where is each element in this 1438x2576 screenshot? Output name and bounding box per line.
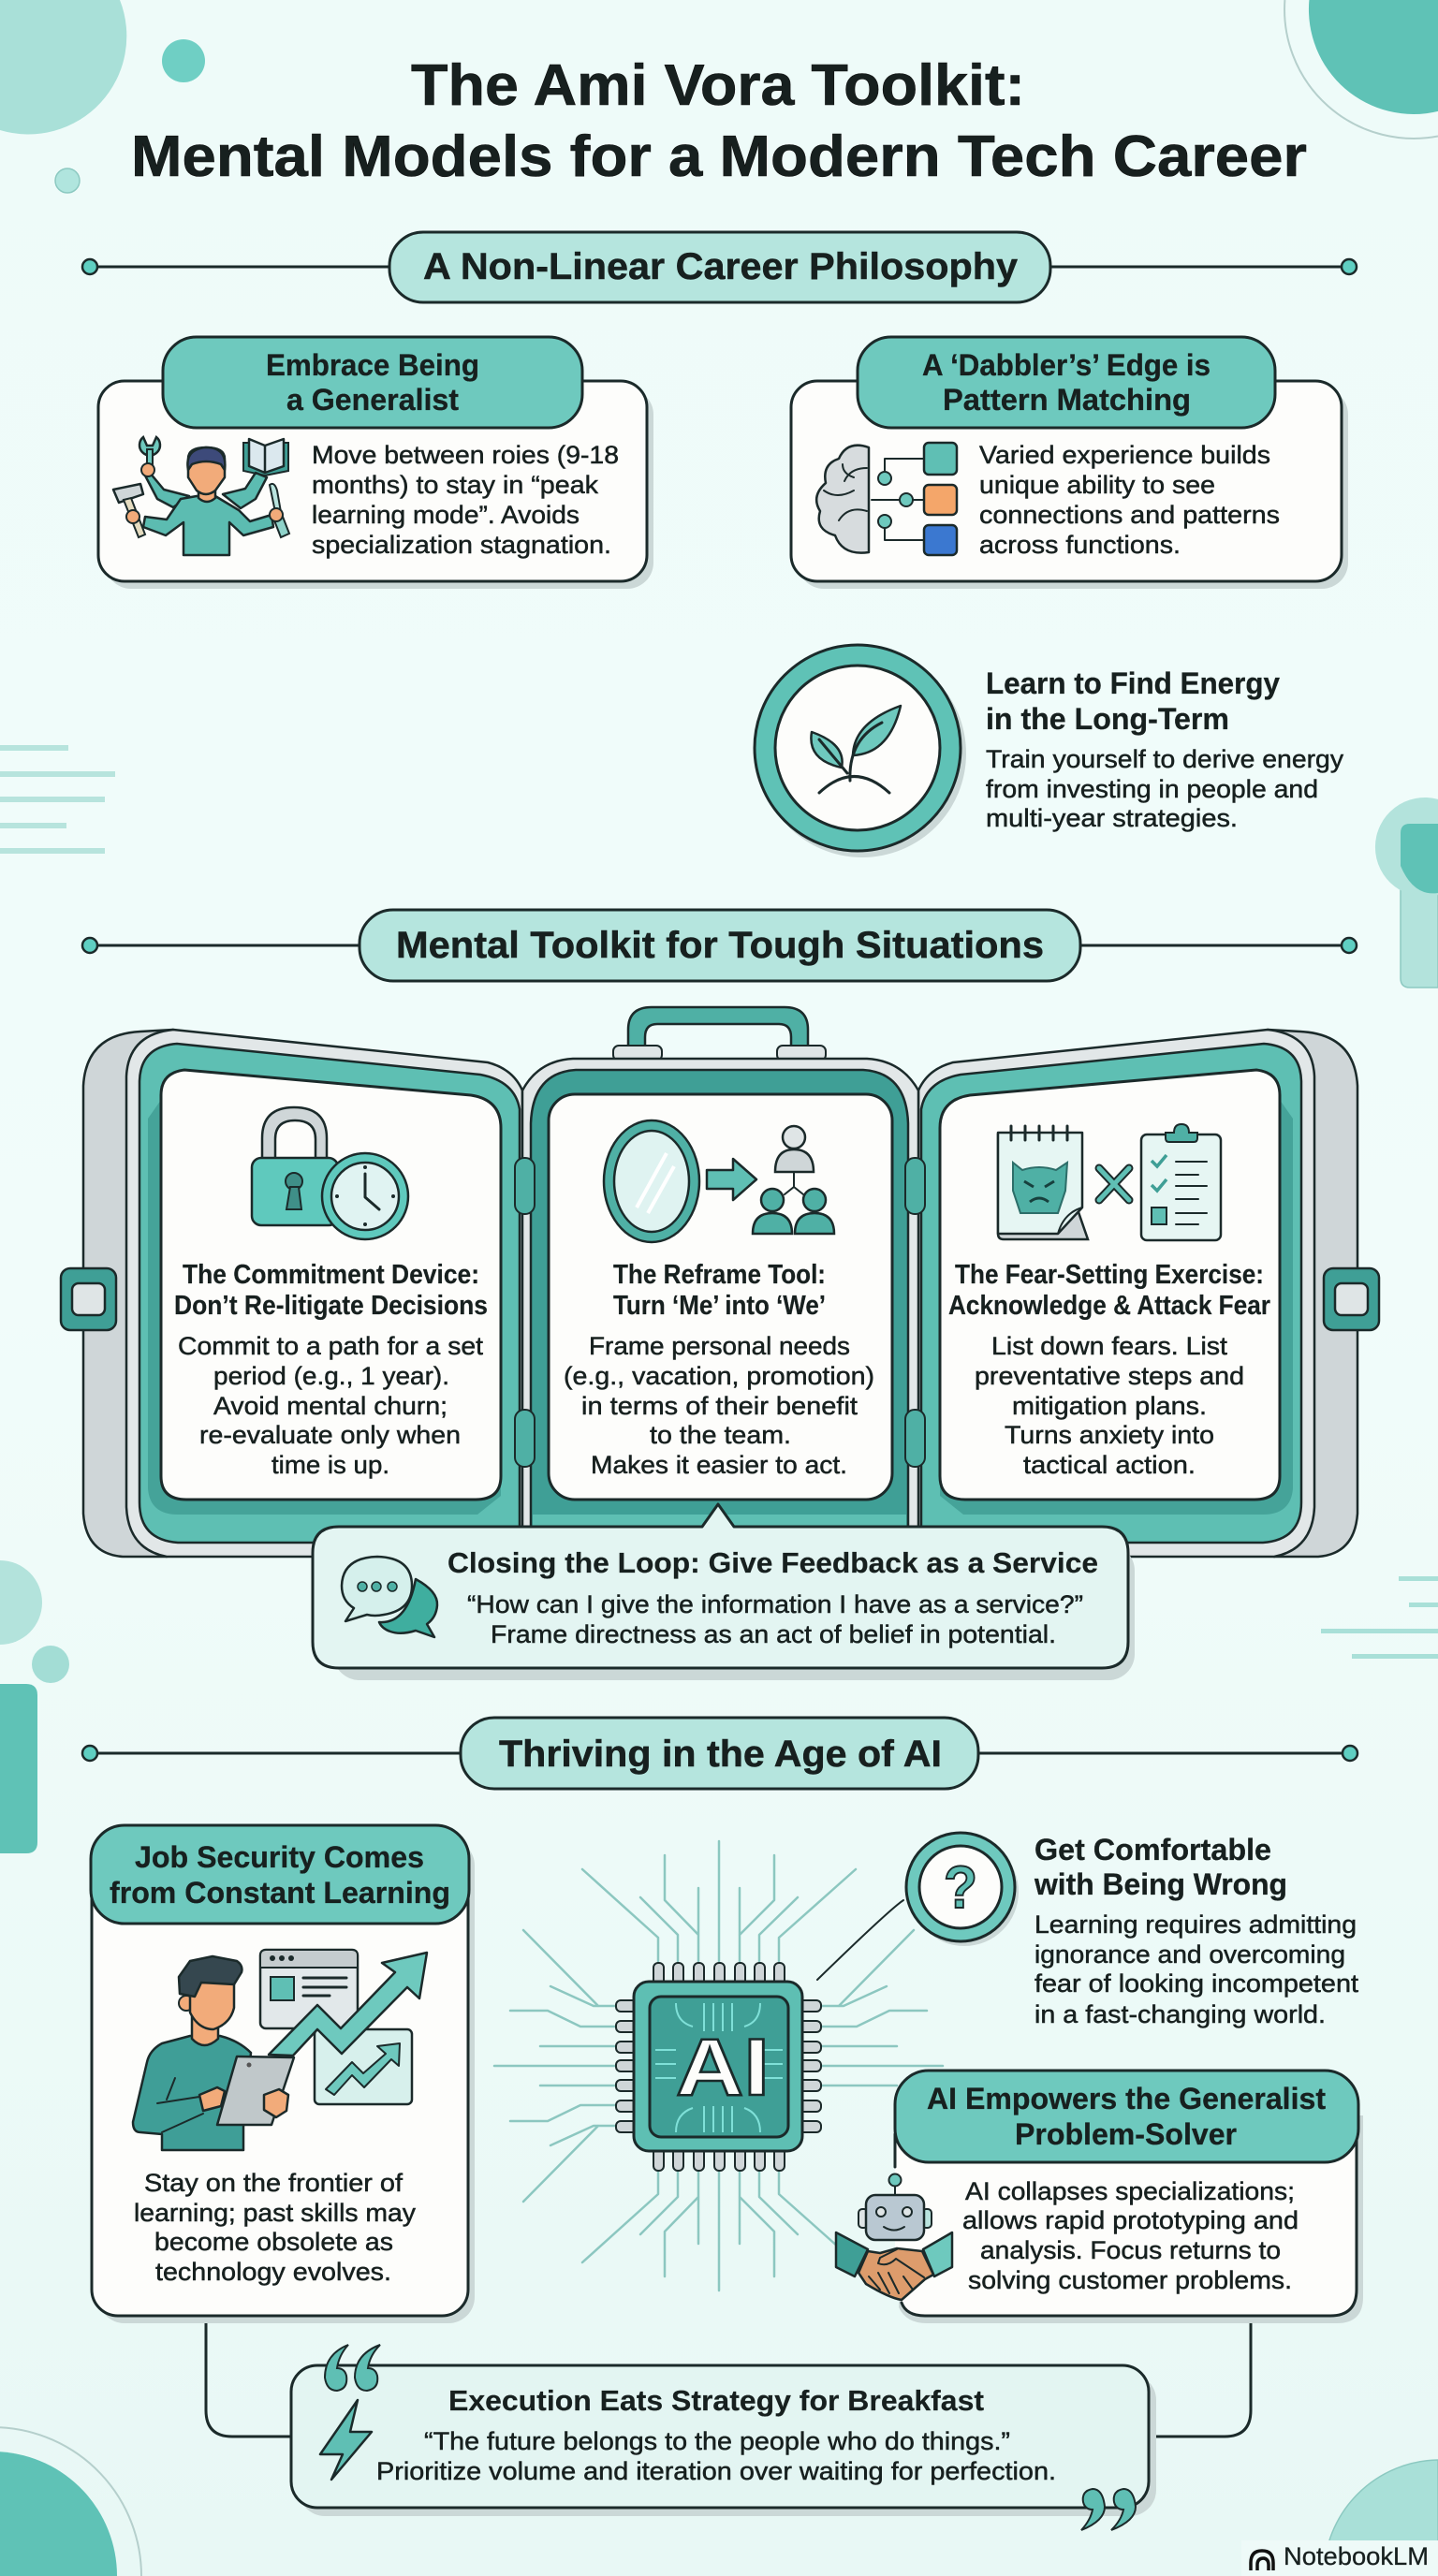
card header: AI Empowers the Generalist <box>927 2082 1326 2115</box>
NotebookLM logo: NotebookLM <box>1284 2542 1429 2570</box>
panel: commitment device <box>161 1070 501 1500</box>
body text: Train yourself to derive energy <box>986 745 1344 773</box>
card header <box>163 337 582 428</box>
panel: get comfortable with being wrong <box>817 1833 1359 2028</box>
body text <box>975 1332 1244 1479</box>
icon: closing quote mark <box>1081 2489 1136 2530</box>
body text: Varied experience builds <box>979 441 1270 469</box>
body text: Move between roies (9-18 <box>312 441 619 469</box>
body text: fear of looking incompetent <box>1034 1969 1359 1998</box>
body text: learning mode”. Avoids <box>312 501 580 529</box>
body text <box>134 2169 417 2286</box>
body text: analysis. Focus returns to <box>980 2236 1281 2264</box>
middle tray <box>522 1059 918 1557</box>
panel: execution eats strategy for breakfast <box>291 2345 1156 2530</box>
heading <box>948 1260 1270 1321</box>
section heading: Thriving in the Age of AI: Thriving in the Age of AI <box>499 1734 942 1775</box>
body text: Learning requires admitting <box>1034 1910 1357 1939</box>
icon: robot and handshake <box>836 2174 952 2300</box>
panel: reframe tool <box>549 1094 892 1500</box>
heading <box>1034 1833 1287 1901</box>
callout text: Closing the Loop: Give Feedback as a Service <box>448 1546 1098 1579</box>
body text: preventative steps and <box>975 1362 1244 1390</box>
title <box>131 53 1307 189</box>
suitcase handle <box>613 1007 826 1061</box>
connector lines to execution box <box>206 2316 1251 2437</box>
heading: Don’t Re-litigate Decisions <box>174 1291 488 1321</box>
heading: Learn to Find Energy <box>986 666 1280 700</box>
heading: The Commitment Device: <box>183 1260 479 1290</box>
quote text: “The future belongs to the people who do things.” <box>424 2427 1010 2455</box>
quote text: Prioritize volume and iteration over waiting for perfection. <box>376 2457 1056 2485</box>
heading: The Fear-Setting Exercise: <box>955 1260 1264 1290</box>
body text <box>962 2177 1299 2294</box>
section heading: Mental Toolkit for Tough Situations: Mental Toolkit for Tough Situations <box>396 925 1044 966</box>
icon: person with tablet and growth arrow <box>133 1950 427 2150</box>
left latch <box>61 1268 116 1330</box>
icon: speech bubbles <box>342 1557 437 1637</box>
body text: re-evaluate only when <box>199 1421 461 1449</box>
callout text: “How can I give the information I have as a service?” <box>467 1590 1083 1618</box>
panel: embrace being a generalist <box>98 337 653 589</box>
chip label: AI <box>676 2023 770 2113</box>
card header: from Constant Learning <box>110 1876 450 1910</box>
body text: across functions. <box>979 531 1181 559</box>
heading: Acknowledge & Attack Fear <box>948 1291 1270 1321</box>
body text: months) to stay in “peak <box>312 471 599 499</box>
icon: fear monster note and checklist <box>998 1124 1221 1240</box>
card header: Embrace Being <box>266 348 479 382</box>
body text: unique ability to see <box>979 471 1215 499</box>
body text: mitigation plans. <box>1012 1392 1207 1420</box>
body text <box>1034 1910 1359 2028</box>
body text: in a fast-changing world. <box>1034 2000 1326 2028</box>
body text: ignorance and overcoming <box>1034 1940 1345 1969</box>
panel: AI empowers the generalist <box>836 2071 1363 2323</box>
NotebookLM logo <box>1241 2540 1438 2576</box>
panel: dabbler's edge is pattern matching <box>791 337 1348 589</box>
body text: technology evolves. <box>155 2258 391 2286</box>
heading: Turn ‘Me’ into ‘We’ <box>613 1291 826 1321</box>
body text: (e.g., vacation, promotion) <box>564 1362 874 1390</box>
card header: Pattern Matching <box>943 383 1191 417</box>
body text: Avoid mental churn; <box>213 1392 448 1420</box>
body text: from investing in people and <box>986 775 1318 803</box>
card header: a Generalist <box>286 383 459 417</box>
body text: specialization stagnation. <box>312 531 611 559</box>
body text: in terms of their benefit <box>581 1392 858 1420</box>
AI chip with circuit lines <box>494 1841 943 2291</box>
icon: mirror, arrow and team <box>604 1120 834 1242</box>
body text <box>178 1332 484 1479</box>
body text <box>986 745 1344 832</box>
title: The Ami Vora Toolkit: <box>411 53 1025 118</box>
heading: The Reframe Tool: <box>613 1260 826 1290</box>
panel: learn to find energy in the long-term <box>755 645 1344 857</box>
heading <box>986 666 1280 736</box>
title: Mental Models for a Modern Tech Career <box>131 124 1307 189</box>
callout: closing the loop <box>313 1504 1135 1680</box>
body text: Turns anxiety into <box>1005 1421 1214 1449</box>
hinges <box>515 1158 925 1467</box>
section heading: A Non-Linear Career Philosophy: A Non-Linear Career Philosophy <box>423 246 1019 287</box>
icon: padlock and clock <box>252 1107 408 1239</box>
body text: Stay on the frontier of <box>144 2169 404 2197</box>
body text: period (e.g., 1 year). <box>213 1362 449 1390</box>
body text: become obsolete as <box>154 2228 393 2256</box>
callout text <box>448 1546 1098 1648</box>
chip pins <box>616 1963 821 2171</box>
body text: time is up. <box>271 1451 389 1479</box>
body text: connections and patterns <box>979 501 1280 529</box>
panel: job security <box>91 1825 475 2323</box>
body text: solving customer problems. <box>968 2266 1292 2294</box>
section heading: A Non-Linear Career Philosophy <box>82 232 1357 302</box>
body text <box>979 441 1280 559</box>
quote text <box>376 2384 1056 2485</box>
heading: with Being Wrong <box>1034 1867 1287 1901</box>
body text: AI collapses specializations; <box>965 2177 1295 2205</box>
card header <box>858 337 1275 428</box>
heading: Get Comfortable <box>1034 1833 1271 1866</box>
chip body <box>634 1982 802 2151</box>
icon: multi-armed person with tools <box>113 437 289 555</box>
icon: question mark ring: ? <box>944 1853 977 1921</box>
icon: question mark ring <box>906 1833 1019 1946</box>
circuit traces <box>494 1841 943 2291</box>
body text: Makes it easier to act. <box>591 1451 847 1479</box>
icon: opening quote mark <box>325 2345 380 2391</box>
body text: List down fears. List <box>991 1332 1228 1360</box>
connector line <box>817 1900 903 1980</box>
body text: tactical action. <box>1023 1451 1196 1479</box>
heading <box>613 1260 826 1321</box>
icon: brain connected to colored nodes <box>816 443 957 555</box>
section heading: Mental Toolkit for Tough Situations <box>82 910 1357 981</box>
heading: in the Long-Term <box>986 702 1229 736</box>
icon: sprout in ring <box>755 645 966 857</box>
section heading: Thriving in the Age of AI <box>82 1718 1357 1789</box>
body text: allows rapid prototyping and <box>962 2206 1299 2234</box>
right panel shell <box>918 1030 1357 1557</box>
body text: Frame personal needs <box>589 1332 850 1360</box>
card header: Problem-Solver <box>1015 2117 1237 2151</box>
card header: A ‘Dabbler’s’ Edge is <box>922 348 1211 382</box>
body text <box>312 441 619 559</box>
body text: Commit to a path for a set <box>178 1332 484 1360</box>
callout text: Frame directness as an act of belief in potential. <box>491 1620 1056 1648</box>
heading <box>174 1260 488 1321</box>
body text: to the team. <box>650 1421 791 1449</box>
icon: lightning bolt <box>320 2400 372 2480</box>
body text: learning; past skills may <box>134 2199 417 2227</box>
panel: fear-setting exercise <box>940 1070 1280 1500</box>
left panel shell <box>83 1030 522 1557</box>
card header: Job Security Comes <box>135 1840 424 1874</box>
quote text: Execution Eats Strategy for Breakfast <box>448 2384 984 2417</box>
toolkit suitcase <box>61 1007 1379 1557</box>
card header <box>91 1825 469 1924</box>
body text <box>564 1332 874 1479</box>
body text: multi-year strategies. <box>986 804 1238 832</box>
right latch <box>1324 1268 1379 1330</box>
card header <box>895 2071 1358 2162</box>
